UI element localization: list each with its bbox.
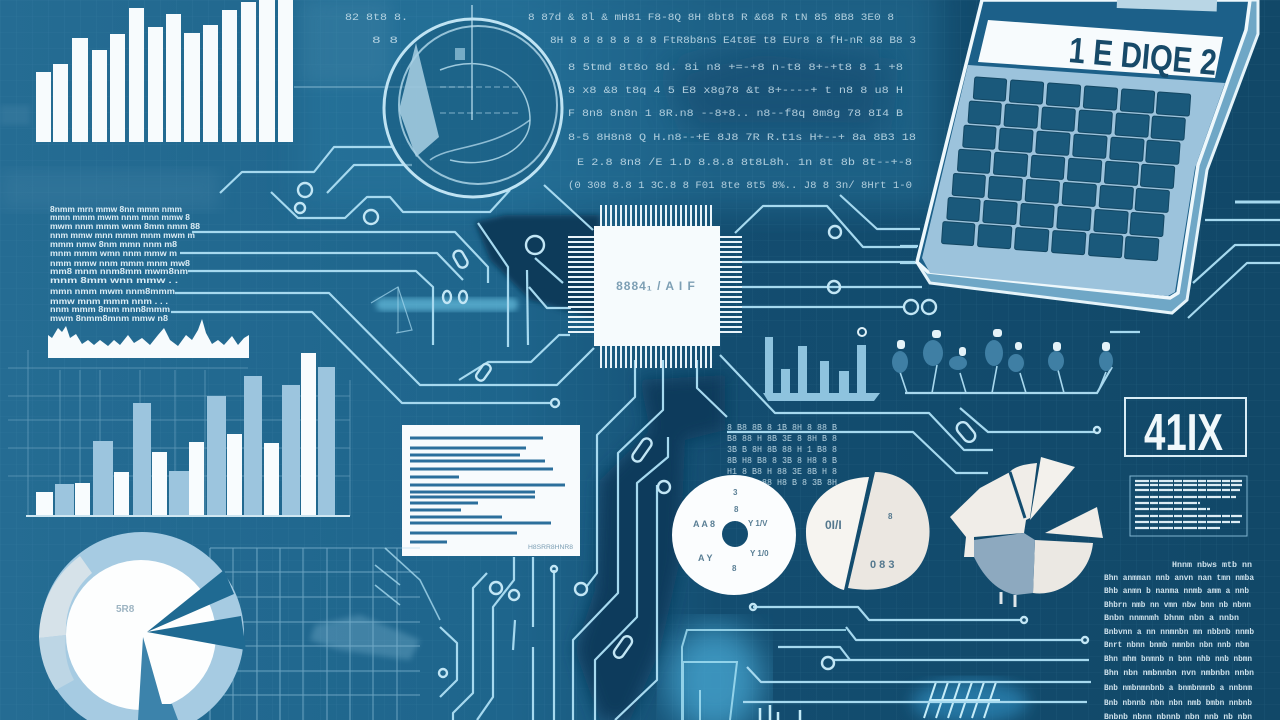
text block: bottom right column: Bnbvnn a nn nnmnbn mn nbbnb nnmb [1104, 628, 1254, 637]
glow: central streak [371, 287, 518, 333]
donut chart: 8 [734, 505, 739, 514]
text block: bottom right column [1104, 561, 1254, 720]
donut chart: A Y [698, 553, 713, 563]
text block: left: 8nmm mrn mmw 8nn mmm nmm [50, 205, 182, 214]
text block: top centre: (0 308 8.8 1 3C.8 8 F01 8te 8t5 8%.. J8 8 3n/ 8Hrt 1-0 [568, 180, 912, 192]
calculator [917, 0, 1258, 313]
text block: data matrix: 8 8H B 88 H8 B 8 3B 8H [727, 478, 837, 488]
text block: bottom right column: Bhn anmman nnb anvn nan tmn nmba [1104, 574, 1254, 583]
donut chart: bottom left: 5R8 [116, 604, 135, 615]
calculator display: 1 E DIQE 2 [1067, 29, 1218, 83]
text box [1130, 476, 1247, 536]
text block: top centre: 8 x8 &8 t8q 4 5 E8 x8g78 &t 8+----+ t n8 8 u8 H [568, 86, 903, 97]
circuit nodes [295, 183, 1100, 677]
text block: bottom right column: Bhn nbn nmbnnbn nvn nmbnbn nnbn [1104, 669, 1254, 678]
text block: left: nnm mmw mnn mmm mnm mwm m [50, 231, 195, 240]
grid panel: bottom left [210, 548, 440, 720]
chip [568, 205, 742, 368]
text block: top centre: 8-5 8H8n8 Q H.n8--+E 8J8 7R R.t1s H+--+ 8a 8B3 18 [568, 133, 916, 144]
calculator display [978, 20, 1223, 83]
text block: data matrix: H1 8 B8 H 88 3E 8B H 8 [727, 467, 837, 477]
text block: bottom right column: Bnrt nbnn bnmb nmnbn nbn nnb nbm [1104, 641, 1249, 650]
chart: grouped bars with grid [8, 350, 350, 516]
text block: bottom right column: Bnb nbnnb nbn nbn nmb bmbn nnbnb [1104, 699, 1252, 708]
text block: bottom right column: Bhbrn nmb nn vmn nbw bnn nb nbnn [1104, 601, 1251, 610]
text block: top centre: 8 8 [372, 36, 398, 47]
calculator keys [941, 77, 1191, 261]
text block: left: nmm mmw nnm mmm mnm mw8 [50, 259, 191, 268]
dark background shapes [0, 0, 890, 720]
text block: top centre: 8 87d & 8l & mH81 F8-8Q 8H 8bt8 R &68 R tN 85 8B8 3E0 8 [528, 12, 894, 24]
text block: bottom right column: Hnnm nbws mtb nn [1172, 561, 1252, 570]
pendant row [892, 329, 1113, 393]
split pie chart: 0I/I [825, 518, 842, 532]
text block: left: nnm mmm 8mm mnn8mmm [50, 305, 170, 314]
split pie chart: 0 8 3 [870, 559, 894, 571]
split pie chart [806, 472, 930, 590]
text block: top centre: F 8n8 8n8n 1 8R.n8 --8+8.. n8--f8q 8m8g 78 8I4 B [568, 108, 903, 120]
text block: bottom right column: Bnb nmbnmnbnb a bnmbnmnb a nnbnm [1104, 684, 1252, 693]
glow: bottom screens [667, 625, 1028, 720]
text block: data matrix: 8B H8 B8 8 3B 8 H8 8 B [727, 456, 838, 466]
split pie chart: 8 [888, 512, 893, 521]
exploded pie chart [950, 457, 1103, 607]
lighter top band [300, 0, 940, 210]
donut chart: 8 [732, 564, 737, 573]
text block: top centre: 82 8t8 8. [345, 13, 408, 24]
text block: top centre [345, 12, 916, 192]
text block: left: mmw mnm mmm nnm . . . [50, 297, 168, 306]
text block: left: mwm nnm mmm wnm 8mm nmm 88 [50, 222, 201, 231]
donut chart [672, 475, 796, 595]
text block: top centre: 8H 8 8 8 8 8 8 8 FtR8b8nS E4t8E t8 EUr8 8 fH-nR 88 B8 3 [550, 35, 916, 47]
text block: data matrix: 3B B 8H 8B 88 H 1 B8 8 [727, 445, 837, 455]
text block: data matrix [727, 423, 838, 488]
calculator key panel [922, 65, 1225, 296]
calculator body [917, 0, 1250, 298]
donut chart: 3 [733, 488, 738, 497]
text block: left: mwm 8nmm8mnm mmw n8 [50, 314, 169, 323]
text block: left: mm8 mnm nnm8mm mwm8nm [50, 267, 188, 276]
text block: left: mmn mmm mwm nnm mnn mmw 8 [50, 213, 191, 222]
text block: left: mnm mmm wmn nnm mmw m [50, 249, 177, 258]
chart: top-left white bars [36, 0, 293, 142]
calculator side shadow [918, 0, 1258, 313]
text block: bottom right column: Bhn mhm bnmnb n bnn nhb nnb nbmn [1104, 655, 1252, 664]
text block: data matrix: B8 88 H 8B 3E 8 8H B 8 [727, 434, 837, 444]
small bar chart [763, 328, 880, 401]
donut chart: bottom left [39, 532, 246, 720]
text block: data matrix: 8 B8 8B 8 1B 8H 8 88 B [727, 423, 838, 433]
document panel [402, 425, 580, 556]
donut chart: Y 1/0 [750, 549, 769, 558]
text block: bottom right column: Bnbn nnmnmh bhnm nbn a nnbn [1104, 614, 1239, 623]
donut chart: A A 8 [693, 519, 715, 529]
lens circle [384, 5, 562, 197]
chart: sparkline area [48, 319, 249, 358]
text block: left [50, 205, 201, 323]
calculator top badge [1117, 0, 1217, 11]
text block: left: mnm 8mm wnn mmw . . [50, 276, 178, 285]
value box: 41IX [1144, 404, 1223, 462]
text block: bottom right column: Bhb anmn b nanma nnmb amm a nnb [1104, 587, 1249, 596]
chip: 8884₁ / A I F [616, 279, 696, 293]
circuit traces [171, 147, 1280, 720]
text block: top centre: E 2.8 8n8 /E 1.D 8.8.8 8t8L8h. 1n 8t 8b 8t--+-8 [577, 157, 912, 169]
document panel: H8SRR8HNR8 [528, 545, 574, 551]
text block: top centre: 8 5tmd 8t8o 8d. 8i n8 +=-+8 n-t8 8+-+t8 8 1 +8 [568, 62, 903, 74]
donut chart: Y 1/V [748, 519, 768, 528]
text block: left: mmm nmw 8nm mmn nnm m8 [50, 240, 178, 249]
text block: left: mmn nmm mwm nnm8mmm [50, 287, 175, 296]
